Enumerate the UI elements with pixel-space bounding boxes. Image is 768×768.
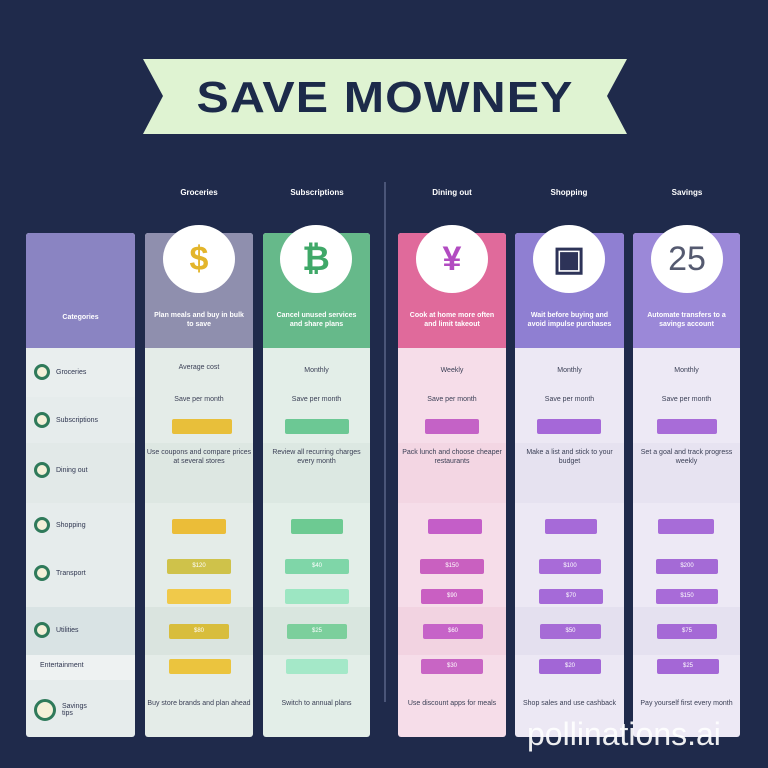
panel: savings column: Pay yourself first every month bbox=[640, 700, 733, 707]
column titles: Shopping bbox=[551, 188, 587, 197]
panel: groceries column: Average cost bbox=[179, 364, 219, 371]
panel: label column: Transport bbox=[56, 570, 86, 576]
panel: savings column: $25 bbox=[683, 663, 693, 669]
icon: subscriptions bbox=[280, 225, 352, 293]
panel: savings column: $75 bbox=[682, 628, 692, 634]
panel: groceries column: Plan meals and buy in bulk to save bbox=[154, 312, 244, 328]
title banner bbox=[143, 59, 627, 134]
panel: subscriptions column: Monthly bbox=[304, 367, 329, 374]
panel: subscriptions column: Review all recurring charges every month bbox=[272, 449, 361, 465]
panel: label column: Dining out bbox=[56, 466, 88, 474]
icon: groceries: $ bbox=[190, 240, 208, 278]
column titles: Dining out bbox=[432, 188, 472, 197]
panel: label column: Entertainment bbox=[40, 662, 84, 669]
panel: subscriptions column: Switch to annual plans bbox=[281, 700, 352, 707]
panel: savings column: $150 bbox=[680, 593, 694, 599]
panel: dining column: Save per month bbox=[427, 396, 477, 403]
icon: shopping bbox=[533, 225, 605, 293]
panel: savings column: Save per month bbox=[662, 396, 711, 403]
panel: shopping column: Wait before buying and avoid impulse purchases bbox=[528, 312, 611, 328]
panel: subscriptions column: $25 bbox=[312, 628, 322, 634]
panel: groceries column: $80 bbox=[194, 628, 204, 634]
icon: savings: 25 bbox=[668, 240, 706, 278]
panel: dining column: $60 bbox=[448, 628, 458, 634]
icon: dining bbox=[416, 225, 488, 293]
icon: groceries bbox=[163, 225, 235, 293]
column titles bbox=[180, 188, 702, 197]
panel: dining column: Cook at home more often and limit takeout bbox=[410, 312, 494, 328]
icon: savings bbox=[651, 225, 723, 293]
panel: shopping column: Shop sales and use cashback bbox=[523, 700, 616, 707]
panel: dining column: Use discount apps for meals bbox=[408, 700, 496, 707]
panel: label column: Categories bbox=[62, 314, 99, 321]
panel: shopping column: $20 bbox=[565, 663, 575, 669]
column titles: Subscriptions bbox=[290, 188, 344, 197]
column titles: Groceries bbox=[180, 188, 218, 197]
watermark: pollinations.ai bbox=[527, 716, 721, 752]
panel: dining column bbox=[398, 233, 506, 737]
panel: groceries column: $120 bbox=[192, 563, 206, 569]
panel: shopping column: Monthly bbox=[557, 367, 582, 374]
panel: label column: Savings bbox=[62, 703, 87, 710]
panel: groceries column bbox=[145, 233, 253, 737]
panel: label column: Groceries bbox=[56, 368, 86, 376]
panel: shopping column: $100 bbox=[563, 563, 577, 569]
panel: groceries column: Buy store brands and plan ahead bbox=[147, 700, 251, 707]
panel: savings column: $200 bbox=[680, 563, 694, 569]
panel: shopping column: Save per month bbox=[545, 396, 594, 403]
panel: shopping column: $70 bbox=[566, 593, 576, 599]
panel: savings column: Monthly bbox=[674, 367, 699, 374]
panel: subscriptions column: Cancel unused services and share plans bbox=[277, 312, 356, 328]
panel: shopping column: Make a list and stick to your budget bbox=[526, 449, 613, 465]
panel: savings column: Set a goal and track progress weekly bbox=[641, 449, 732, 465]
panel: dining column: $30 bbox=[447, 663, 457, 669]
panel: label column bbox=[26, 233, 135, 737]
panel: savings column: Automate transfers to a savings account bbox=[647, 312, 726, 328]
icon: dining: ¥ bbox=[443, 240, 461, 278]
panel: label column: Shopping bbox=[56, 522, 86, 528]
panel: subscriptions column bbox=[263, 233, 370, 737]
panel: label column: Subscriptions bbox=[56, 416, 98, 424]
panel: label column: Utilities bbox=[56, 626, 79, 634]
icon: shopping: ▣ bbox=[553, 240, 585, 278]
panel: groceries column: Use coupons and compare prices at several stores bbox=[147, 449, 251, 465]
panel: subscriptions column: Save per month bbox=[292, 396, 341, 403]
panel: label column: tips bbox=[62, 710, 73, 717]
title text: SAVE MOWNEY bbox=[197, 73, 573, 122]
panel: shopping column bbox=[515, 233, 624, 737]
panel: groceries column: Save per month bbox=[174, 396, 224, 403]
panel: dining column: Pack lunch and choose cheaper restaurants bbox=[402, 449, 502, 465]
column titles: Savings bbox=[672, 188, 702, 197]
divider line bbox=[384, 182, 386, 702]
panel: dining column: $90 bbox=[447, 593, 457, 599]
panel: shopping column: $50 bbox=[565, 628, 576, 634]
panel: dining column: Weekly bbox=[441, 367, 463, 374]
icon: subscriptions: ₿ bbox=[302, 240, 330, 278]
panel: subscriptions column: $40 bbox=[312, 563, 322, 569]
panel: dining column: $150 bbox=[445, 563, 459, 569]
panel: savings column bbox=[633, 233, 740, 737]
